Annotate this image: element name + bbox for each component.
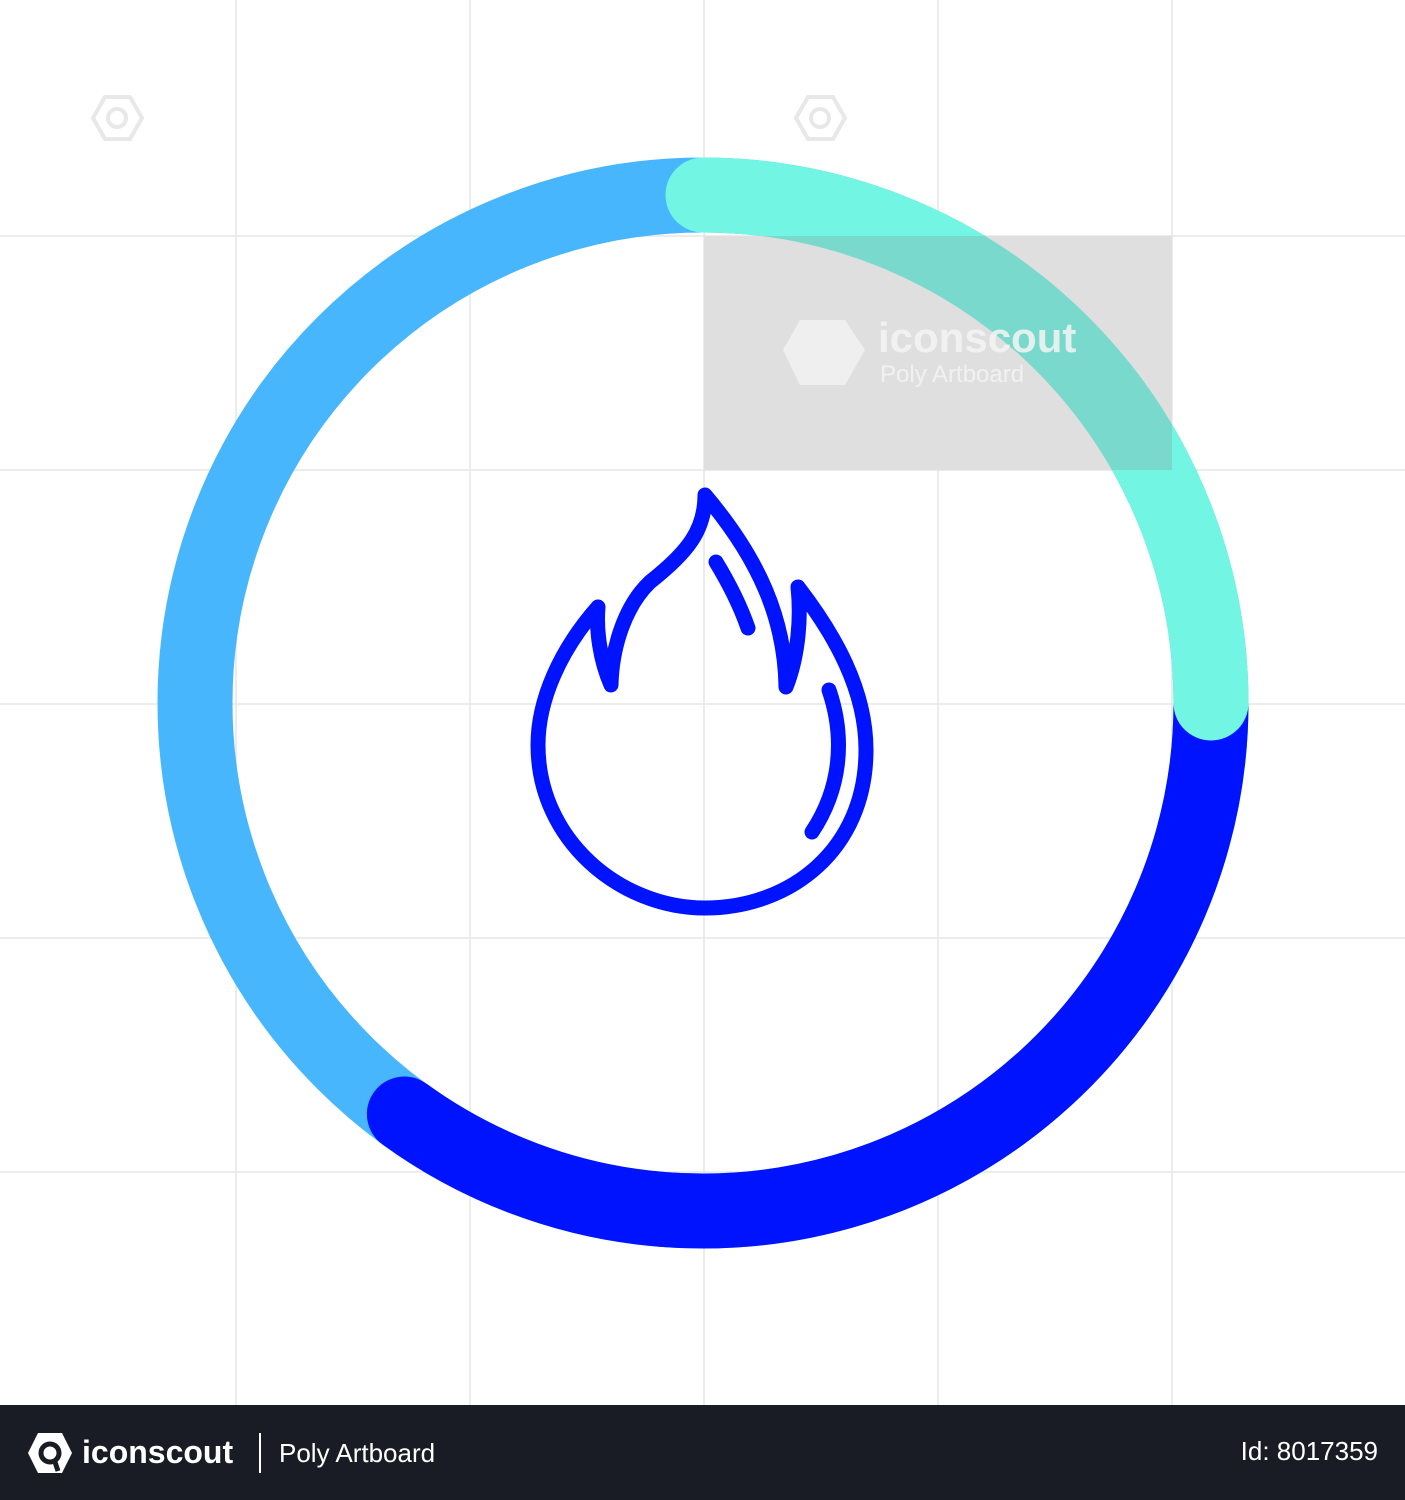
segment: light blue	[195, 195, 1211, 1211]
segment: teal	[703, 195, 1211, 703]
segment: dark blue	[404, 703, 1211, 1211]
icon: flame	[538, 495, 866, 908]
footer logo: iconscout	[82, 1434, 233, 1470]
watermark box: Poly Artboard	[880, 361, 1024, 388]
watermark box	[704, 236, 1172, 470]
small watermark icons	[93, 97, 845, 139]
footer id: Id: 8017359	[1241, 1436, 1378, 1466]
watermark box: iconscout	[878, 314, 1076, 361]
footer logo: Poly Artboard	[279, 1438, 435, 1468]
footer bar	[0, 1405, 1405, 1500]
donut ring	[195, 195, 1211, 1211]
footer logo	[28, 1433, 435, 1473]
